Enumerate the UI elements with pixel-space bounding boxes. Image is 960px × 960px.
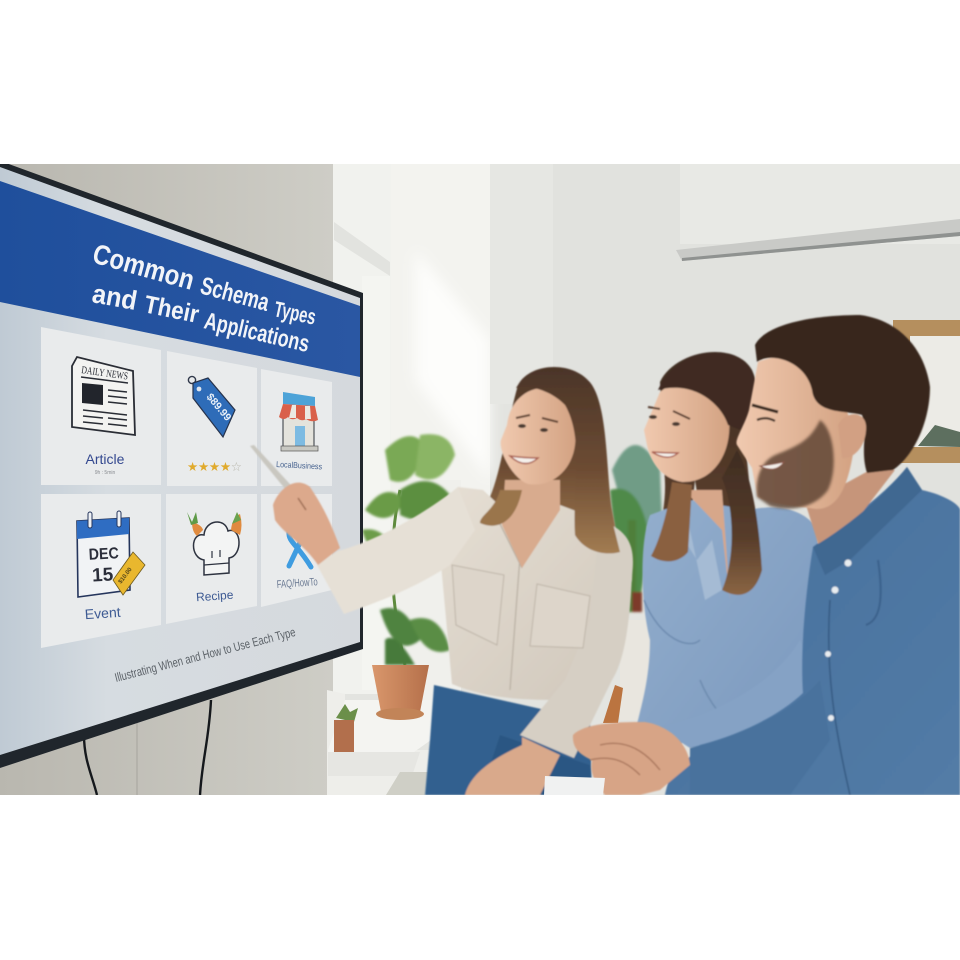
icon: calendar with ticket: 15 [92,564,114,587]
jeans [425,685,592,795]
neck [502,480,560,568]
title text: Their [142,290,202,329]
rating stars: ★★★★☆ [187,460,242,474]
room background [0,164,960,795]
label: FAQ/HowTo: FAQ/HowTo [276,576,318,591]
clasped hands [573,722,690,795]
wall mounted screen [0,162,363,768]
background leafy plant [610,445,662,612]
hair front strands [516,369,620,553]
label: LocalBusiness: LocalBusiness [276,459,322,471]
long strands [722,450,762,595]
collar and neck [684,490,730,600]
back hair [490,366,616,528]
man in denim shirt [573,315,960,795]
icon: calendar with ticket [77,511,145,597]
collar [813,467,922,575]
title text: Common [89,238,198,296]
woman in light denim shirt [637,352,830,748]
woman in cream blouse pointing at screen [250,367,633,795]
hand and pen [250,445,300,501]
face [501,388,576,485]
tile: Recipe [166,494,257,624]
title text: Applications [202,308,312,358]
framed poster [893,320,960,463]
eye and brow [752,405,778,412]
photo scene: team reviewing a schema types screen [0,164,960,795]
title text: and [90,278,140,316]
orange object on side table [603,685,623,723]
beard [757,420,834,509]
small pot on sill [334,704,358,752]
shirt buttons [825,560,852,721]
icon: chef hat with carrots [187,512,242,575]
screen bezel [0,162,363,768]
shirt [637,500,820,745]
shirt body [665,467,960,795]
icon: calendar with ticket: DEC [88,545,120,564]
neck [806,470,895,550]
label: Event: Event [84,604,121,622]
tile: Product [167,351,257,486]
hair [755,315,930,473]
icon: newspaper [72,357,135,435]
window plant in terracotta pot [362,434,455,720]
icon: price tag: $89.99 [204,391,234,424]
icon: newspaper: DAILY NEWS [81,365,129,383]
title text: Schema [197,272,273,317]
blouse torso [436,487,632,700]
back hair [652,352,760,598]
screen surface [0,167,360,755]
facial features [648,407,690,419]
blue title banner [0,181,360,377]
label: Article: Article [86,451,125,467]
right sleeve [520,520,633,758]
tile: Article: 9h : 5min [95,470,115,476]
face [736,357,855,509]
title text [92,245,316,352]
face [644,381,729,482]
label: Recipe: Recipe [196,588,234,604]
ear [838,414,866,458]
ceiling light bar [676,219,960,261]
resting hand [465,737,560,795]
tile: LocalBusiness [261,369,332,486]
tile: Article [41,327,161,485]
icon: crossed tools [289,530,311,567]
paper in lap [544,776,605,795]
title text: Types [272,296,318,330]
cables under the screen [84,700,211,795]
pointing sleeve [318,491,454,614]
icon: storefront [279,392,318,451]
hair over forehead [658,353,757,430]
tile: Event [41,494,161,648]
facial features [516,415,558,422]
sleeve [657,640,830,748]
tile: FAQ / HowTo [261,494,332,607]
screen caption: Illustrating When and How to Use Each Type [113,625,297,685]
blouse pockets [452,565,590,648]
icon: calendar with ticket: $10.00 [118,566,134,585]
